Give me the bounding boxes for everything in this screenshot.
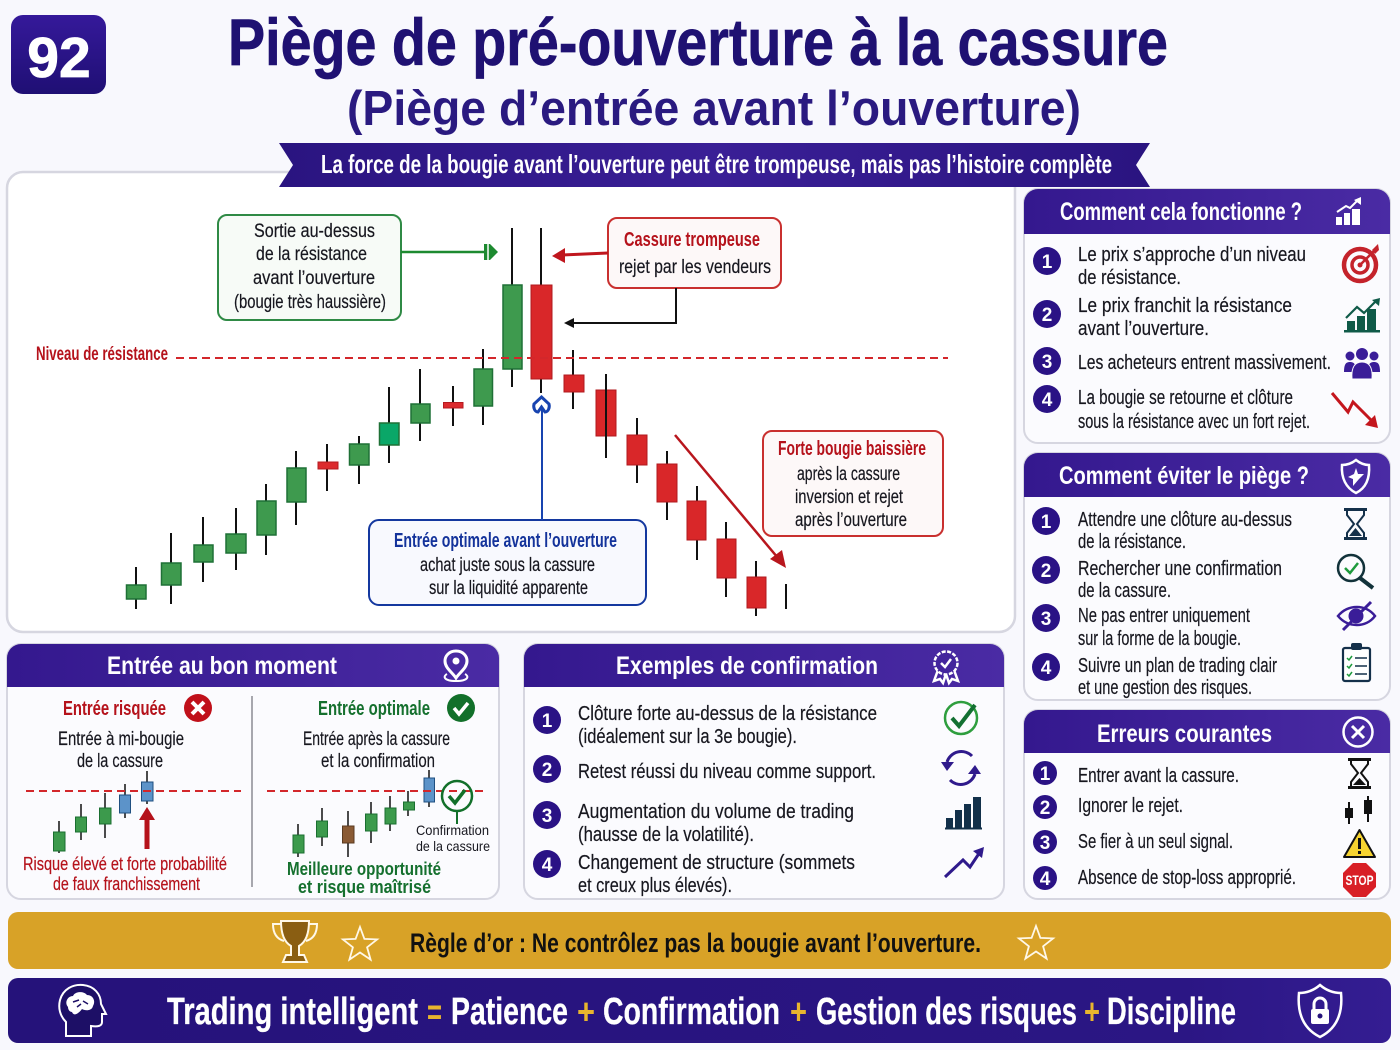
icon: star <box>1019 926 1053 959</box>
list item 3 <box>533 801 854 846</box>
callout: strong bearish candle: inversion et rejet <box>795 487 904 508</box>
formula text: = <box>427 991 442 1032</box>
list item 4: Suivre un plan de trading clair <box>1078 655 1277 677</box>
icon: stop sign: STOP <box>1346 872 1374 888</box>
number badge: 92 <box>27 26 91 90</box>
icon: trophy <box>273 921 317 962</box>
mini candles <box>54 771 153 853</box>
callout: optimal entry: achat juste sous la cassure <box>420 555 595 576</box>
list item 3: Augmentation du volume de trading <box>578 801 854 823</box>
callout: exit above resistance: de la résistance <box>256 244 367 265</box>
subtitle: (Piège d’entrée avant l’ouverture) <box>347 82 1081 136</box>
icon: clipboard checklist <box>1343 643 1370 681</box>
banner: smart trading formula <box>8 978 1391 1043</box>
column: optimal entry: Meilleure opportunité <box>287 859 441 879</box>
list item 1: 1 <box>1041 512 1052 533</box>
list item 3: 3 <box>542 806 552 827</box>
column: risky entry: de faux franchissement <box>53 874 200 894</box>
list item 1 <box>1033 244 1306 289</box>
icon: uptrend arrow <box>945 847 984 877</box>
list item 2 <box>1033 295 1292 340</box>
arrow: risky entry point <box>139 807 155 849</box>
icon: award ribbon <box>934 652 958 683</box>
title: Piège de pré-ouverture à la cassure <box>228 5 1168 79</box>
callout: strong bearish candle <box>763 431 943 536</box>
icon: magnifier with check <box>1338 555 1373 588</box>
panel header <box>1024 453 1390 497</box>
arrow: optimal entry marker <box>534 397 549 520</box>
arrow: rejection connector <box>564 288 676 328</box>
arrow: bearish move <box>675 435 786 568</box>
panel header: Erreurs courantes <box>1097 720 1272 748</box>
panel header <box>1024 710 1390 753</box>
panel: how it works <box>1024 189 1390 443</box>
level line <box>267 790 487 792</box>
icon: head with brain <box>59 985 106 1036</box>
callout: exit above resistance: (bougie très haussière) <box>234 292 386 313</box>
icon: green check <box>447 694 475 722</box>
icon: rising bars <box>1336 197 1361 225</box>
icon: cross circle <box>1344 718 1372 746</box>
list item 2: Rechercher une confirmation <box>1078 558 1282 580</box>
callout: false breakout: rejet par les vendeurs <box>619 257 771 278</box>
formula text: Trading intelligent <box>167 991 418 1033</box>
banner: golden rule <box>8 912 1391 969</box>
column: optimal entry <box>267 694 490 897</box>
list item 3: 3 <box>1041 609 1051 630</box>
mini candles <box>293 770 434 857</box>
icon: falling arrow <box>1332 393 1378 428</box>
formula text: + <box>577 991 595 1032</box>
column: optimal entry: et risque maîtrisé <box>298 877 431 897</box>
column: optimal entry: de la cassure <box>416 838 490 854</box>
panel: how to avoid the trap <box>1024 453 1390 700</box>
list item 1: 1 <box>1040 764 1051 785</box>
list item 3 <box>1033 830 1233 854</box>
list item 2: avant l’ouverture. <box>1078 318 1209 340</box>
icon: crossed eye <box>1338 602 1375 630</box>
icon: refresh <box>941 752 981 784</box>
risk level line <box>26 790 241 792</box>
callout: exit above resistance: Sortie au-dessus <box>254 221 375 242</box>
list item 4: et une gestion des risques. <box>1078 677 1252 699</box>
list item 3 <box>1033 347 1331 375</box>
column: risky entry <box>23 694 241 894</box>
callout: strong bearish candle: Forte bougie baissière <box>778 438 926 460</box>
list item 3: (hausse de la volatilité). <box>578 824 754 846</box>
list item 2: Le prix franchit la résistance <box>1078 295 1292 317</box>
list item 3: 3 <box>1040 833 1050 854</box>
number badge <box>11 15 106 94</box>
list item 1: Le prix s’approche d’un niveau <box>1078 244 1306 266</box>
list item 1: Attendre une clôture au-dessus <box>1078 509 1292 531</box>
panel header <box>524 644 1004 687</box>
list item 1: Entrer avant la cassure. <box>1078 765 1239 787</box>
callout: strong bearish candle: après l’ouverture <box>795 510 907 531</box>
list item 1: 1 <box>542 711 553 732</box>
callout: exit above resistance: avant l’ouverture <box>253 268 375 289</box>
column: risky entry: Risque élevé et forte probabilité <box>23 854 227 874</box>
list item 2 <box>533 755 876 783</box>
list item 4: Absence de stop-loss approprié. <box>1078 867 1296 889</box>
list item 1: (idéalement sur la 3e bougie). <box>578 726 797 748</box>
rule text: Règle d’or : Ne contrôlez pas la bougie avant l’ouverture. <box>410 928 981 958</box>
list item 4: 4 <box>1041 658 1052 679</box>
list item 1: de la résistance. <box>1078 531 1186 553</box>
resistance label: Niveau de résistance <box>36 344 168 365</box>
icon: target <box>1344 244 1379 281</box>
formula text <box>167 991 1236 1033</box>
formula text: Confirmation <box>603 991 780 1033</box>
callout: false breakout <box>608 218 781 288</box>
list item 3: 3 <box>1042 352 1052 373</box>
column: risky entry: Entrée à mi-bougie <box>58 729 184 750</box>
list item 4: et creux plus élevés). <box>578 875 732 897</box>
panel: confirmation examples <box>524 644 1004 899</box>
icon: shield with lock <box>1299 985 1341 1037</box>
column: risky entry: Entrée risquée <box>63 698 166 720</box>
callout: strong bearish candle: après la cassure <box>797 464 900 485</box>
icon: star <box>343 927 377 960</box>
icon: confirmation check <box>442 781 472 824</box>
panel: common mistakes <box>1024 710 1390 899</box>
panel header <box>1024 189 1390 234</box>
callout: false breakout: Cassure trompeuse <box>624 229 760 251</box>
column: optimal entry: et la confirmation <box>321 751 435 772</box>
panel header: Exemples de confirmation <box>616 652 878 680</box>
list item 4: Changement de structure (sommets <box>578 852 855 874</box>
list item 4: 4 <box>1042 390 1053 411</box>
list item 1: Clôture forte au-dessus de la résistance <box>578 703 877 725</box>
list item 2 <box>1032 556 1282 602</box>
list item 3: Les acheteurs entrent massivement. <box>1078 352 1331 374</box>
list item 2: Ignorer le rejet. <box>1078 795 1183 817</box>
formula text: Gestion des risques <box>816 991 1077 1033</box>
list item 3: Se fier à un seul signal. <box>1078 831 1233 853</box>
list item 1: 1 <box>1042 252 1053 273</box>
arrow: exit callout to candle <box>401 244 498 260</box>
candlesticks: rising phase <box>126 228 522 609</box>
icon: warning <box>1344 830 1375 857</box>
icon: growth chart <box>1344 298 1380 332</box>
column: optimal entry: Entrée après la cassure <box>303 729 450 750</box>
list item 3 <box>1032 604 1250 650</box>
icon: two candles <box>1345 796 1372 824</box>
divider <box>251 696 253 887</box>
list item 1: de résistance. <box>1078 267 1181 289</box>
list item 4 <box>1033 385 1310 433</box>
list item 4: La bougie se retourne et clôture <box>1078 387 1293 409</box>
panel: main chart <box>7 172 1015 632</box>
list item 2: de la cassure. <box>1078 580 1171 602</box>
list item 4 <box>1032 653 1277 699</box>
panel: right time to enter <box>7 644 499 899</box>
panel header: Comment cela fonctionne ? <box>1060 198 1302 226</box>
callout: optimal entry: sur la liquidité apparente <box>429 578 588 599</box>
ribbon: subtitle banner: La force de la bougie avant l’ouverture peut être trompeuse, mais pas l’histoire complète <box>321 149 1112 179</box>
icon: check circle <box>945 702 977 734</box>
formula text: Patience <box>451 991 568 1033</box>
icon: hourglass <box>1348 758 1371 789</box>
icon: red cross <box>184 694 212 722</box>
icon: volume bars <box>945 797 982 830</box>
icon: shield <box>1342 460 1369 493</box>
list item 4: sous la résistance avec un fort rejet. <box>1078 411 1310 433</box>
list item 4: 4 <box>542 855 553 876</box>
callout: exit above resistance <box>218 215 401 320</box>
list item 1 <box>1032 507 1292 553</box>
resistance level line <box>176 357 948 359</box>
list item 4 <box>533 850 855 897</box>
column: optimal entry: Confirmation <box>416 822 489 838</box>
list item 2: Retest réussi du niveau comme support. <box>578 761 876 783</box>
icon: people <box>1344 348 1380 379</box>
list item 2: 2 <box>1041 561 1051 582</box>
panel header <box>7 644 499 687</box>
column: optimal entry: Entrée optimale <box>318 698 430 720</box>
arrow: false breakout to candle <box>552 248 608 263</box>
icon: stop sign <box>1343 863 1376 897</box>
callout: optimal entry: Entrée optimale avant l’ouverture <box>394 530 617 552</box>
icon: location pin <box>445 651 467 681</box>
list item 4: 4 <box>1040 869 1051 890</box>
column: risky entry: de la cassure <box>77 751 163 772</box>
callout: optimal entry <box>369 520 646 605</box>
formula text: Discipline <box>1107 991 1236 1033</box>
formula text: + <box>790 991 807 1032</box>
panel header: Comment éviter le piège ? <box>1059 462 1309 490</box>
icon: hourglass <box>1344 508 1367 540</box>
list item 3: sur la forme de la bougie. <box>1078 628 1241 650</box>
candlesticks: falling phase <box>531 228 786 616</box>
list item 2: 2 <box>1040 798 1050 819</box>
list item 2: 2 <box>542 760 552 781</box>
formula text: + <box>1084 991 1100 1032</box>
list item 3: Ne pas entrer uniquement <box>1078 605 1250 627</box>
ribbon: subtitle banner <box>279 143 1150 187</box>
list item 1 <box>1033 761 1239 787</box>
list item 2: 2 <box>1042 305 1052 326</box>
list item 2 <box>1033 795 1183 819</box>
list item 1 <box>533 703 877 748</box>
panel header: Entrée au bon moment <box>107 652 338 680</box>
list item 4 <box>1033 866 1296 890</box>
